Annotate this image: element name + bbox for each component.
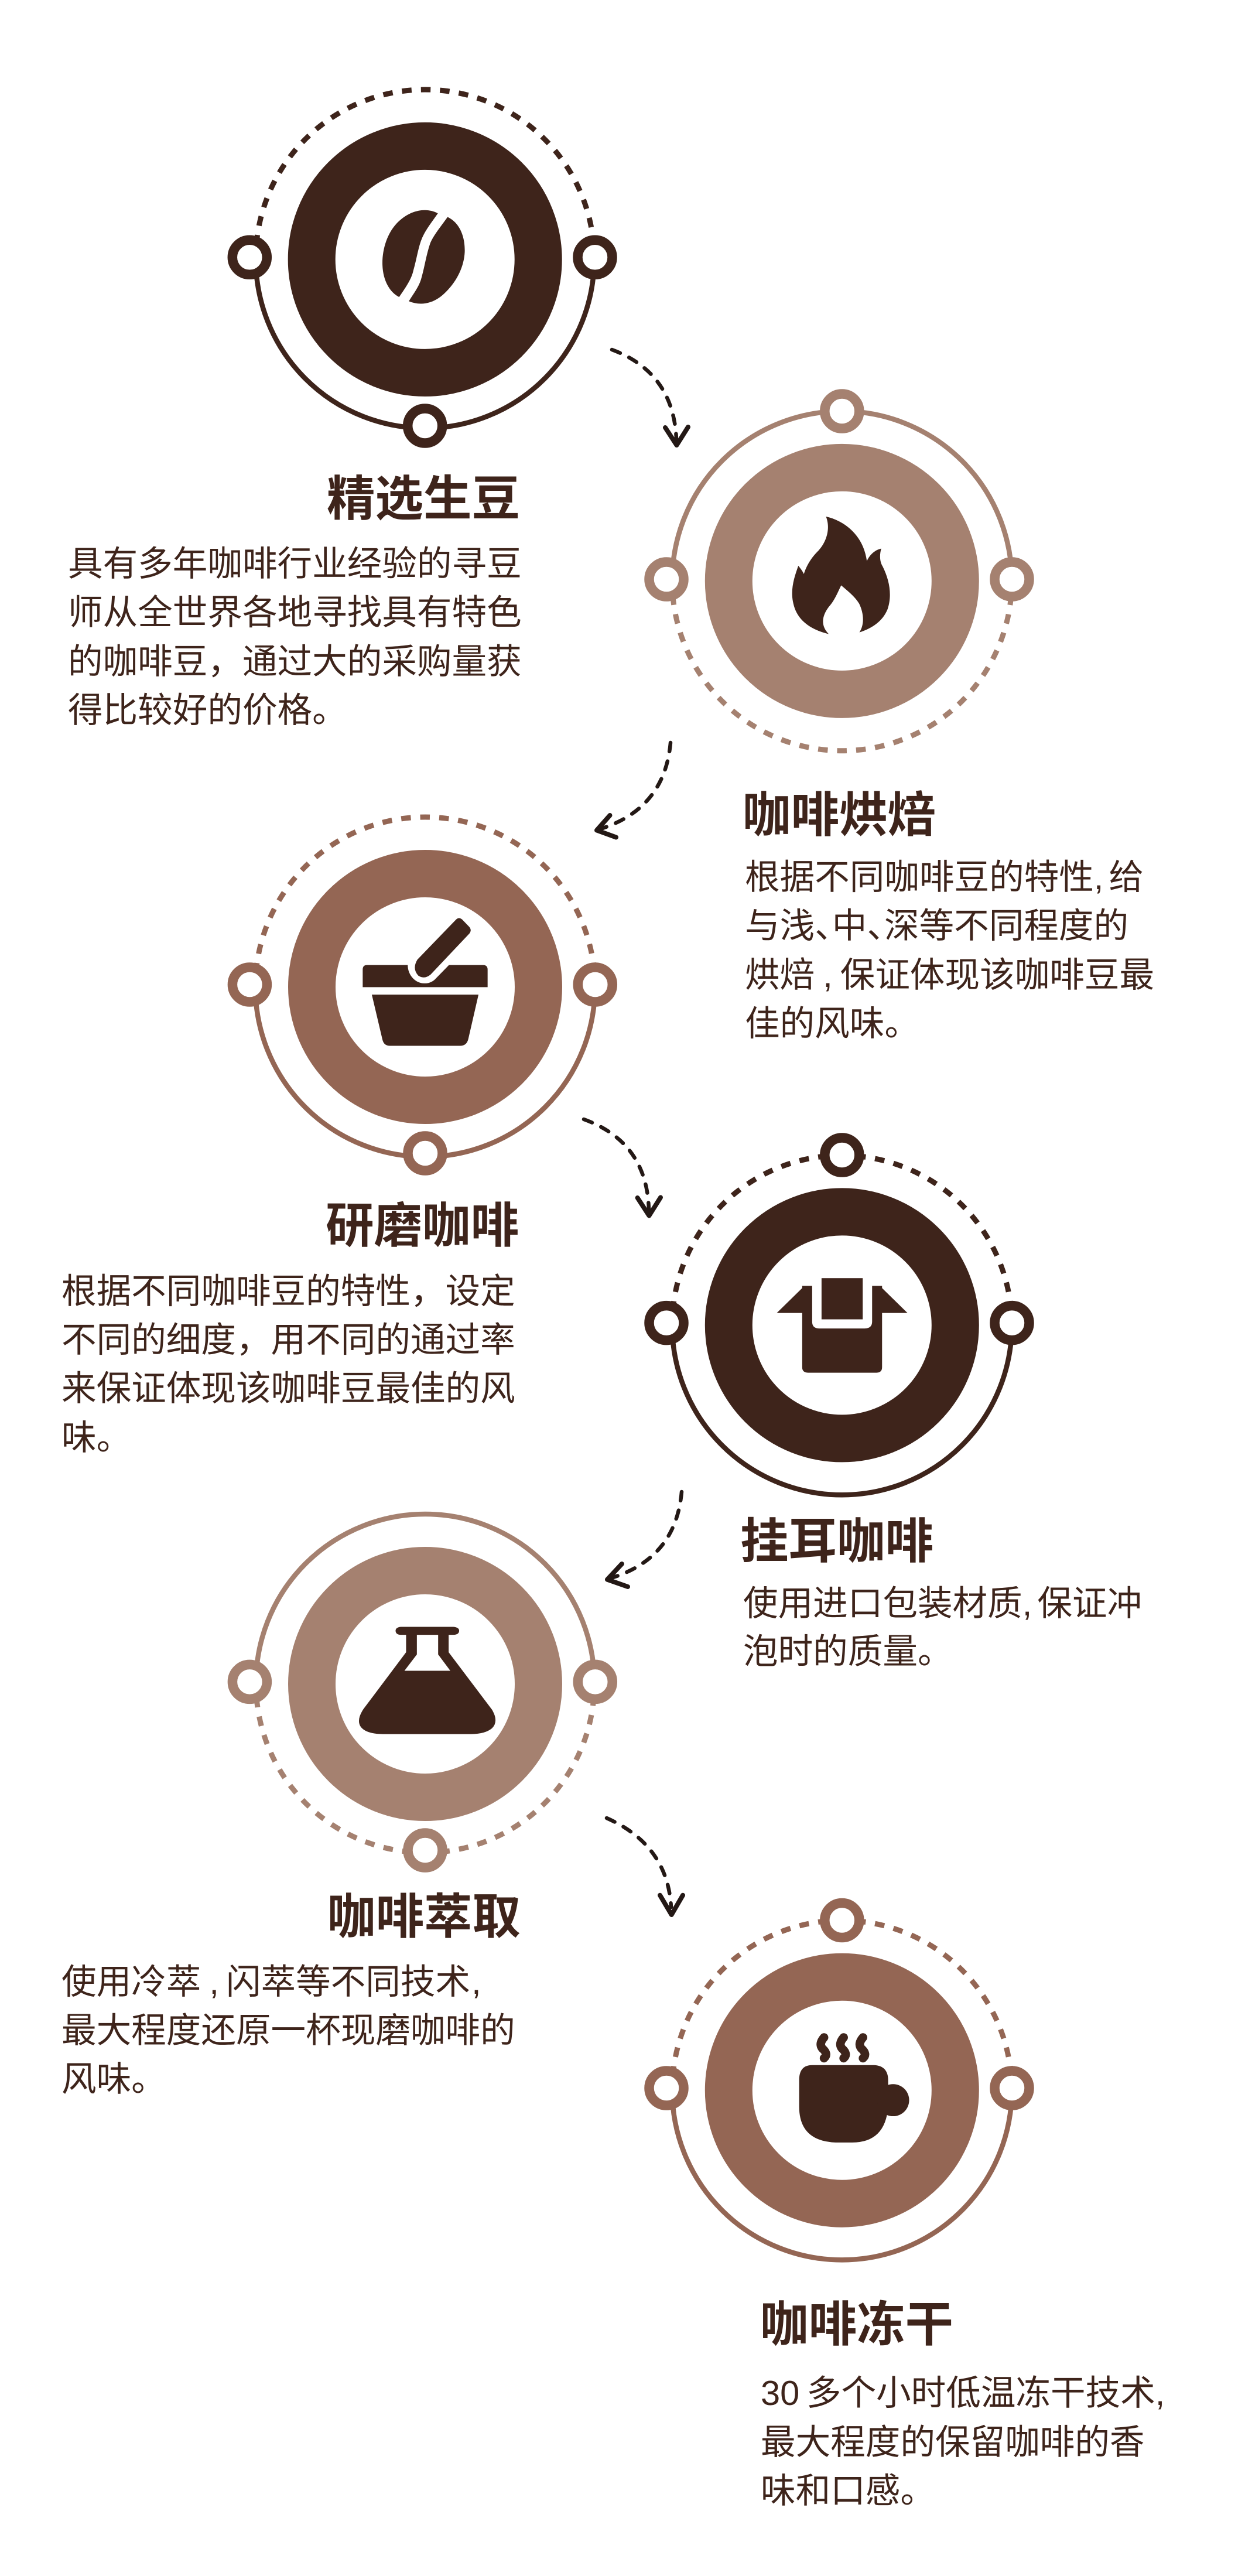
node left (649, 2071, 684, 2105)
icon: grinder basket (362, 918, 488, 1046)
arrow: step 2 to 3 (597, 743, 671, 838)
node top (825, 394, 859, 429)
icon: coffee bean (382, 210, 465, 303)
panel: step 6 badge (649, 1903, 1029, 2260)
dashed orbit (256, 1683, 594, 1853)
panel: step 2 badge (649, 394, 1029, 751)
icon: flask (359, 1627, 495, 1734)
arrow: step 4 to 5 (607, 1492, 682, 1587)
node left (232, 968, 267, 1002)
dashed orbit (672, 1921, 1012, 2090)
solid orbit (672, 411, 1012, 581)
solid orbit (672, 1325, 1012, 1495)
donut ring (728, 1212, 955, 1439)
solid orbit (256, 1514, 594, 1683)
node left (232, 240, 267, 275)
panel: step 3 badge (232, 817, 613, 1170)
node top (825, 1137, 859, 1173)
text block: step 2: 与浅、中、深等不同程度的 (745, 906, 1128, 945)
text block: step 3: 根据不同咖啡豆的特性，设定 (61, 1272, 515, 1311)
node left (649, 1306, 684, 1340)
text block: step 3: 来保证体现该咖啡豆最佳的风 (61, 1369, 515, 1408)
text block: step 4: 泡时的质量。 (743, 1632, 953, 1671)
text block: step 2: 根据不同咖啡豆的特性,给 (745, 857, 1144, 897)
panel: step 4 badge (649, 1137, 1029, 1495)
text block: step 3: 不同的细度，用不同的通过率 (61, 1320, 515, 1359)
node left (232, 1665, 267, 1699)
node right (994, 562, 1029, 596)
node bottom (408, 409, 442, 443)
arrow: step 5 to 6 (607, 1818, 683, 1915)
node right (994, 2071, 1029, 2105)
dashed orbit (672, 1156, 1012, 1325)
text block: step 5: 风味。 (61, 2059, 166, 2099)
node right (578, 1665, 613, 1699)
heading: step 1: 精选生豆 (327, 472, 520, 526)
icon: steaming cup (799, 2038, 909, 2143)
text block: step 6: 最大程度的保留咖啡的香 (761, 2423, 1145, 2462)
panel: step 1 badge (232, 90, 613, 443)
text block: step 1: 的咖啡豆，通过大的采购量获 (68, 642, 522, 681)
text block: step 1: 具有多年咖啡行业经验的寻豆 (68, 544, 522, 583)
panel: step 5 badge (232, 1514, 613, 1867)
node right (577, 240, 613, 275)
text block: step 5 (61, 1962, 515, 2099)
node left (649, 562, 684, 596)
solid orbit (255, 987, 595, 1157)
text block: step 6: 30 多个小时低温冻干技术, (761, 2373, 1165, 2413)
text block: step 2: 烘焙,保证体现该咖啡豆最 (745, 955, 1154, 995)
donut ring (728, 467, 955, 694)
node right (578, 968, 613, 1002)
heading: step 2: 咖啡烘焙 (743, 788, 936, 842)
text block: step 1: 师从全世界各地寻找具有特色 (68, 593, 522, 632)
solid orbit (256, 259, 594, 428)
heading: step 6: 咖啡冻干 (760, 2298, 953, 2352)
text block: step 6 (761, 2373, 1165, 2510)
text block: step 2: 佳的风味。 (745, 1004, 919, 1043)
text block: step 1 (68, 544, 522, 730)
arrow: step 1 to 2 (612, 350, 688, 445)
text block: step 3 (61, 1272, 515, 1457)
donut ring (312, 1571, 539, 1797)
text block: step 2 (745, 857, 1154, 1043)
heading: step 4: 挂耳咖啡 (740, 1515, 933, 1569)
heading: step 5: 咖啡萃取 (327, 1890, 521, 1944)
text block: step 4: 使用进口包装材质,保证冲 (743, 1584, 1142, 1623)
donut ring (312, 874, 539, 1100)
dashed orbit (672, 581, 1012, 751)
node top (825, 1903, 859, 1938)
text block: step 1: 得比较好的价格。 (68, 691, 347, 730)
text block: step 6: 味和口感。 (761, 2471, 935, 2510)
heading: step 3: 研磨咖啡 (326, 1199, 519, 1253)
text block: step 3: 味。 (61, 1418, 131, 1457)
donut ring (312, 146, 538, 373)
text block: step 5: 使用冷萃,闪萃等不同技术, (61, 1962, 481, 2001)
arrow: step 3 to 4 (584, 1119, 661, 1216)
text block: step 4 (743, 1584, 1142, 1671)
node bottom (408, 1833, 443, 1867)
text block: step 5: 最大程度还原一杯现磨咖啡的 (61, 2011, 515, 2050)
dashed orbit (255, 817, 595, 987)
node bottom (408, 1136, 443, 1170)
icon: flame (792, 517, 890, 634)
icon: package box (777, 1278, 908, 1373)
donut ring (728, 1977, 955, 2203)
node right (994, 1306, 1029, 1340)
dashed orbit (256, 90, 594, 259)
solid orbit (672, 2090, 1012, 2260)
